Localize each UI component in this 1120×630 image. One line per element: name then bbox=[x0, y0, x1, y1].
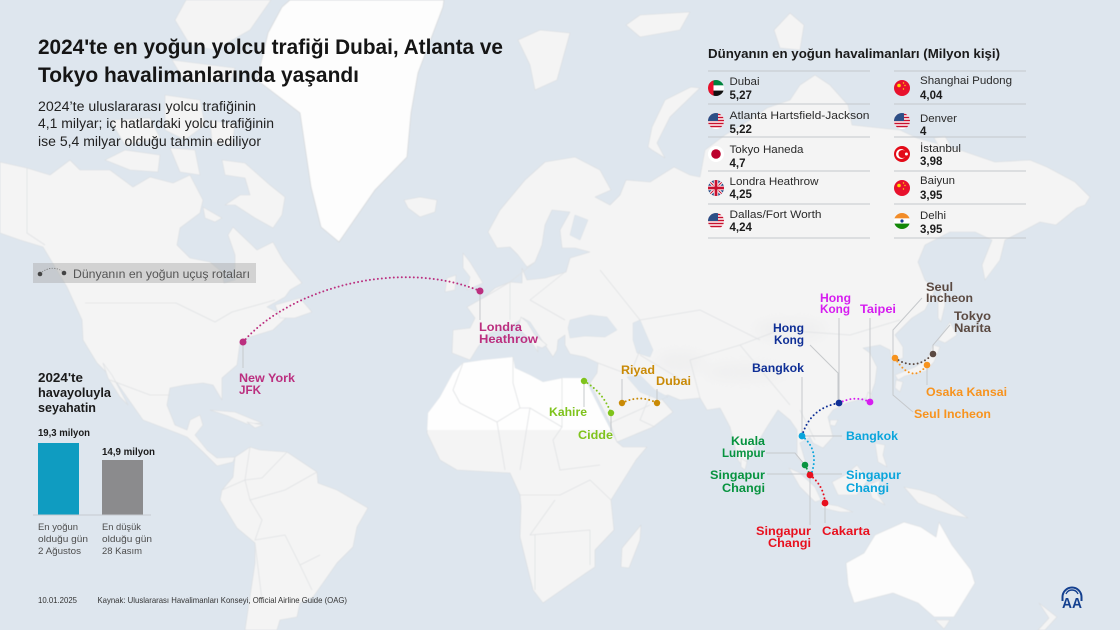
route: New York - London: Londra bbox=[479, 320, 522, 334]
caption: busiest day: 2 Ağustos bbox=[38, 546, 81, 557]
flag: UK bbox=[708, 180, 724, 196]
row: Londra Heathrow: Londra Heathrow bbox=[730, 176, 819, 188]
caption: quietest day: 28 Kasım bbox=[102, 546, 142, 557]
route: Bangkok - Hong Kong: Hong bbox=[773, 321, 804, 335]
route: New York - London bbox=[239, 277, 539, 397]
caption: quietest day bbox=[102, 522, 152, 557]
route: Singapore - Jakarta bbox=[756, 472, 870, 550]
subtitle: 2024’te uluslararası yolcu trafiğinin bbox=[38, 99, 256, 114]
row: Londra Heathrow: 4,25 bbox=[730, 189, 752, 201]
row: Shanghai Pudong: Shanghai Pudong bbox=[920, 75, 1012, 87]
route: New York - London: New York bbox=[239, 371, 295, 385]
flag: China bbox=[894, 180, 910, 196]
row: Dubai: 5,27 bbox=[730, 90, 752, 102]
route: New York - London: JFK bbox=[239, 383, 261, 397]
flag: Turkey bbox=[894, 146, 910, 162]
legend: busiest flight routes bbox=[33, 263, 256, 283]
route: Seoul - Osaka Kansai: Osaka Kansai bbox=[926, 385, 1007, 399]
row: Istanbul bbox=[920, 142, 961, 168]
caption: quietest day: olduğu gün bbox=[102, 534, 152, 545]
row: Delhi: 3,95 bbox=[920, 224, 943, 236]
chart heading: seyahatin bbox=[38, 400, 96, 415]
route: Bangkok - Hong Kong bbox=[752, 321, 842, 436]
subtitle: ise 5,4 milyar olduğu tahmin ediliyor bbox=[38, 134, 262, 149]
bar: quietest day: 14,9 milyon bbox=[102, 447, 155, 458]
route: Seoul - Tokyo Narita: Seul bbox=[926, 280, 953, 294]
route: Seoul - Osaka Kansai bbox=[892, 355, 1007, 421]
row: Dallas/Fort Worth: 4,24 bbox=[730, 222, 752, 234]
row: Atlanta bbox=[730, 110, 870, 136]
route: Kuala Lumpur - Singapore: Lumpur bbox=[722, 446, 765, 460]
route: Kuala Lumpur - Singapore: Singapur bbox=[710, 468, 765, 482]
route: Kuala Lumpur - Singapore: Kuala bbox=[731, 434, 765, 448]
route: Seoul - Tokyo Narita: Narita bbox=[954, 321, 991, 335]
row: Tokyo Haneda: 4,7 bbox=[730, 158, 746, 170]
flag: Japan bbox=[708, 146, 724, 162]
route: Riyadh - Dubai: Dubai bbox=[656, 374, 691, 388]
route: Seoul - Tokyo Narita: Incheon bbox=[926, 291, 973, 305]
row: Istanbul: İstanbul bbox=[920, 142, 961, 155]
route: Hong Kong - Taipei: Taipei bbox=[860, 302, 896, 316]
chart heading bbox=[38, 370, 112, 415]
route: Singapore - Jakarta: Cakarta bbox=[822, 524, 870, 538]
route: Riyadh - Dubai: Riyad bbox=[621, 363, 655, 377]
flag: India bbox=[894, 213, 910, 229]
flag: UAE bbox=[708, 80, 724, 96]
route: Cairo - Jeddah: Cidde bbox=[578, 428, 613, 442]
route: Hong Kong - Taipei bbox=[820, 291, 896, 405]
panel: air travel bar chart bbox=[33, 370, 155, 557]
title: 2024'te en yoğun yolcu trafiği Dubai, Atlanta ve bbox=[38, 36, 503, 59]
chart heading: havayoluyla bbox=[38, 385, 112, 400]
logo: AA bbox=[1062, 588, 1082, 612]
bar: busiest day bbox=[38, 428, 90, 515]
flag: USA bbox=[894, 113, 910, 129]
title bbox=[38, 36, 503, 87]
row: Tokyo Haneda bbox=[730, 144, 804, 170]
row: Istanbul: 3,98 bbox=[920, 156, 943, 168]
row: Delhi bbox=[920, 210, 946, 236]
route: New York - London: Heathrow bbox=[479, 332, 539, 346]
bar: busiest day: 19,3 milyon bbox=[38, 428, 90, 439]
route: Cairo - Jeddah: Kahire bbox=[549, 405, 587, 419]
row: Londra Heathrow bbox=[730, 176, 819, 201]
terrain shading bbox=[656, 320, 825, 380]
route: Bangkok - Singapore: Bangkok bbox=[846, 429, 898, 443]
footer source: Kaynak: Uluslararası Havalimanları Konseyi, Official Airline Guide (OAG) bbox=[98, 595, 347, 605]
table rules bbox=[708, 71, 1026, 238]
row: Baiyun: Baiyun bbox=[920, 175, 955, 187]
route: Seoul - Tokyo Narita: Tokyo bbox=[954, 309, 991, 323]
row: Atlanta: 5,22 bbox=[730, 124, 752, 136]
country borders bbox=[27, 168, 900, 600]
route: Bangkok - Hong Kong: Bangkok bbox=[752, 361, 804, 375]
bar: quietest day bbox=[102, 447, 155, 515]
subtitle: 4,1 milyar; iç hatlardaki yolcu trafiğinin bbox=[38, 116, 274, 131]
caption: busiest day bbox=[38, 522, 88, 557]
row: Denver: 4 bbox=[920, 126, 927, 138]
row: Tokyo Haneda: Tokyo Haneda bbox=[730, 144, 804, 156]
row: Shanghai Pudong: 4,04 bbox=[920, 90, 943, 102]
row: Dallas/Fort Worth bbox=[730, 209, 822, 234]
route: Hong Kong - Taipei: Kong bbox=[820, 302, 850, 316]
subtitle bbox=[38, 99, 274, 149]
logo: AA: AA bbox=[1062, 595, 1082, 612]
route: Bangkok - Hong Kong: Kong bbox=[774, 333, 804, 347]
route: Hong Kong - Taipei: Hong bbox=[820, 291, 851, 305]
route: Bangkok - Singapore: Changi bbox=[846, 481, 889, 495]
caption: quietest day: En düşük bbox=[102, 522, 141, 533]
title: Tokyo havalimanlarında yaşandı bbox=[38, 64, 359, 87]
caption: busiest day: olduğu gün bbox=[38, 534, 88, 545]
legend: busiest flight routes: Dünyanın en yoğun uçuş rotaları bbox=[73, 267, 250, 281]
route: Singapore - Jakarta: Changi bbox=[768, 536, 811, 550]
route: Seoul - Tokyo Narita bbox=[893, 280, 991, 364]
row: Dubai bbox=[730, 76, 760, 102]
row: Dallas/Fort Worth: Dallas/Fort Worth bbox=[730, 209, 822, 221]
route: Singapore - Jakarta: Singapur bbox=[756, 524, 811, 538]
flag: China bbox=[894, 80, 910, 96]
panel: busiest airports table bbox=[708, 46, 1026, 238]
route: Bangkok - Singapore bbox=[799, 429, 901, 495]
row: Dubai: Dubai bbox=[730, 76, 760, 88]
route: Bangkok - Singapore: Singapur bbox=[846, 468, 901, 482]
route: Riyadh - Dubai bbox=[619, 363, 691, 406]
route: Kuala Lumpur - Singapore bbox=[710, 434, 810, 495]
row: Denver: Denver bbox=[920, 113, 957, 125]
flag: USA bbox=[708, 113, 724, 129]
row: Baiyun bbox=[920, 175, 955, 202]
chart heading: 2024'te bbox=[38, 370, 83, 385]
route: Seoul - Osaka Kansai: Seul Incheon bbox=[914, 407, 991, 421]
row: Denver bbox=[920, 113, 957, 138]
footer date: 10.01.2025 bbox=[38, 595, 77, 605]
row: Delhi: Delhi bbox=[920, 210, 946, 222]
table heading: Dünyanın en yoğun havalimanları (Milyon kişi) bbox=[708, 46, 1000, 61]
route: Kuala Lumpur - Singapore: Changi bbox=[722, 481, 765, 495]
route: Cairo - Jeddah bbox=[549, 378, 614, 442]
row: Baiyun: 3,95 bbox=[920, 190, 943, 202]
row: Shanghai Pudong bbox=[920, 75, 1012, 102]
caption: busiest day: En yoğun bbox=[38, 522, 78, 533]
row: Atlanta: Atlanta Hartsfield-Jackson bbox=[730, 110, 870, 122]
flag: USA bbox=[708, 213, 724, 229]
